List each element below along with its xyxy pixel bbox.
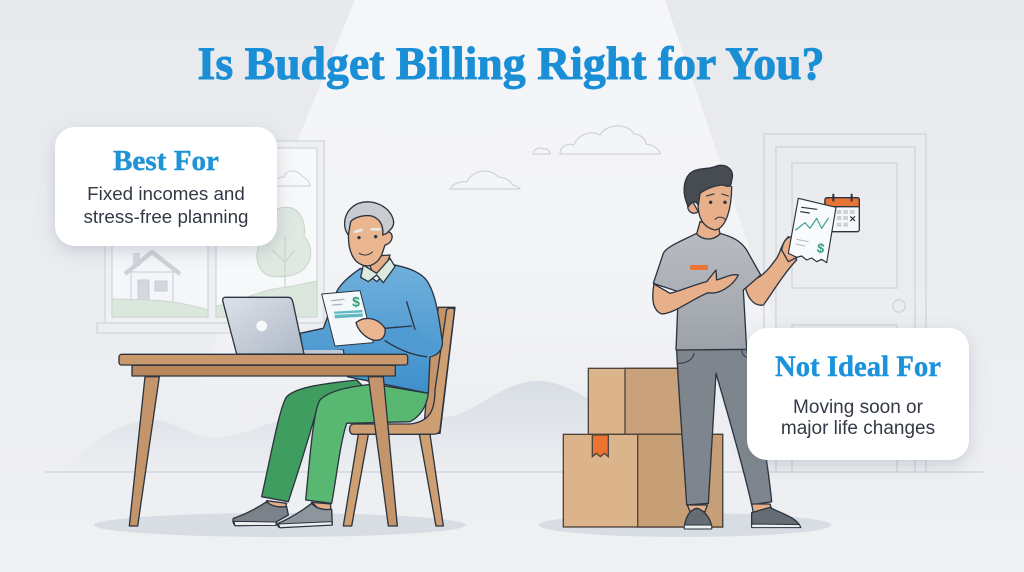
face (698, 178, 732, 230)
left arm (653, 270, 738, 314)
hand holding bill (782, 237, 798, 262)
bill (788, 198, 836, 263)
bill (322, 291, 373, 346)
laptop (223, 297, 304, 354)
bill: $ (816, 240, 826, 256)
house (125, 252, 180, 302)
hill in right pane (216, 281, 317, 317)
window cloud (270, 171, 310, 186)
window (97, 141, 342, 333)
floor shadow left (94, 513, 466, 537)
tree (257, 207, 311, 300)
bill: $ (352, 293, 360, 309)
table (119, 354, 408, 526)
sweater (300, 265, 442, 393)
face (348, 213, 392, 266)
floor line (45, 471, 985, 473)
front shoe (278, 503, 332, 528)
text: best for description: Fixed incomes and (87, 183, 245, 204)
hair (684, 165, 732, 207)
boxes (563, 368, 723, 527)
hand (356, 318, 385, 340)
title: Is Budget Billing Right for You? (198, 38, 824, 90)
tape (592, 435, 608, 457)
back shoe (233, 502, 288, 526)
clouds (450, 126, 660, 189)
grass (112, 299, 208, 317)
young man (653, 165, 859, 529)
text: not ideal for description: Moving soon or (793, 397, 924, 418)
card: best for (55, 127, 277, 246)
sweater sleeve (385, 326, 442, 357)
shoes (687, 505, 707, 512)
back leg (262, 380, 363, 502)
window sill (97, 323, 342, 333)
senior man (223, 202, 442, 528)
hair (345, 202, 394, 235)
light beam (175, 0, 815, 440)
pants (677, 349, 772, 505)
neck and collar (367, 255, 390, 275)
floor shadow right (539, 513, 831, 537)
text: not ideal for description: major life changes (781, 418, 935, 439)
text: best for description: stress-free planning (84, 206, 248, 227)
right arm (745, 237, 797, 305)
eyes (357, 236, 361, 239)
front leg (306, 384, 428, 503)
neck (697, 222, 720, 239)
heading: best for: Best For (113, 145, 219, 177)
ankles (267, 501, 287, 508)
shirt (653, 233, 761, 350)
door (764, 134, 926, 472)
calendar (825, 195, 859, 232)
chair (343, 307, 455, 526)
card: not ideal for (747, 328, 969, 460)
background hills (55, 381, 590, 472)
heading: not ideal for: Not Ideal For (775, 351, 941, 383)
